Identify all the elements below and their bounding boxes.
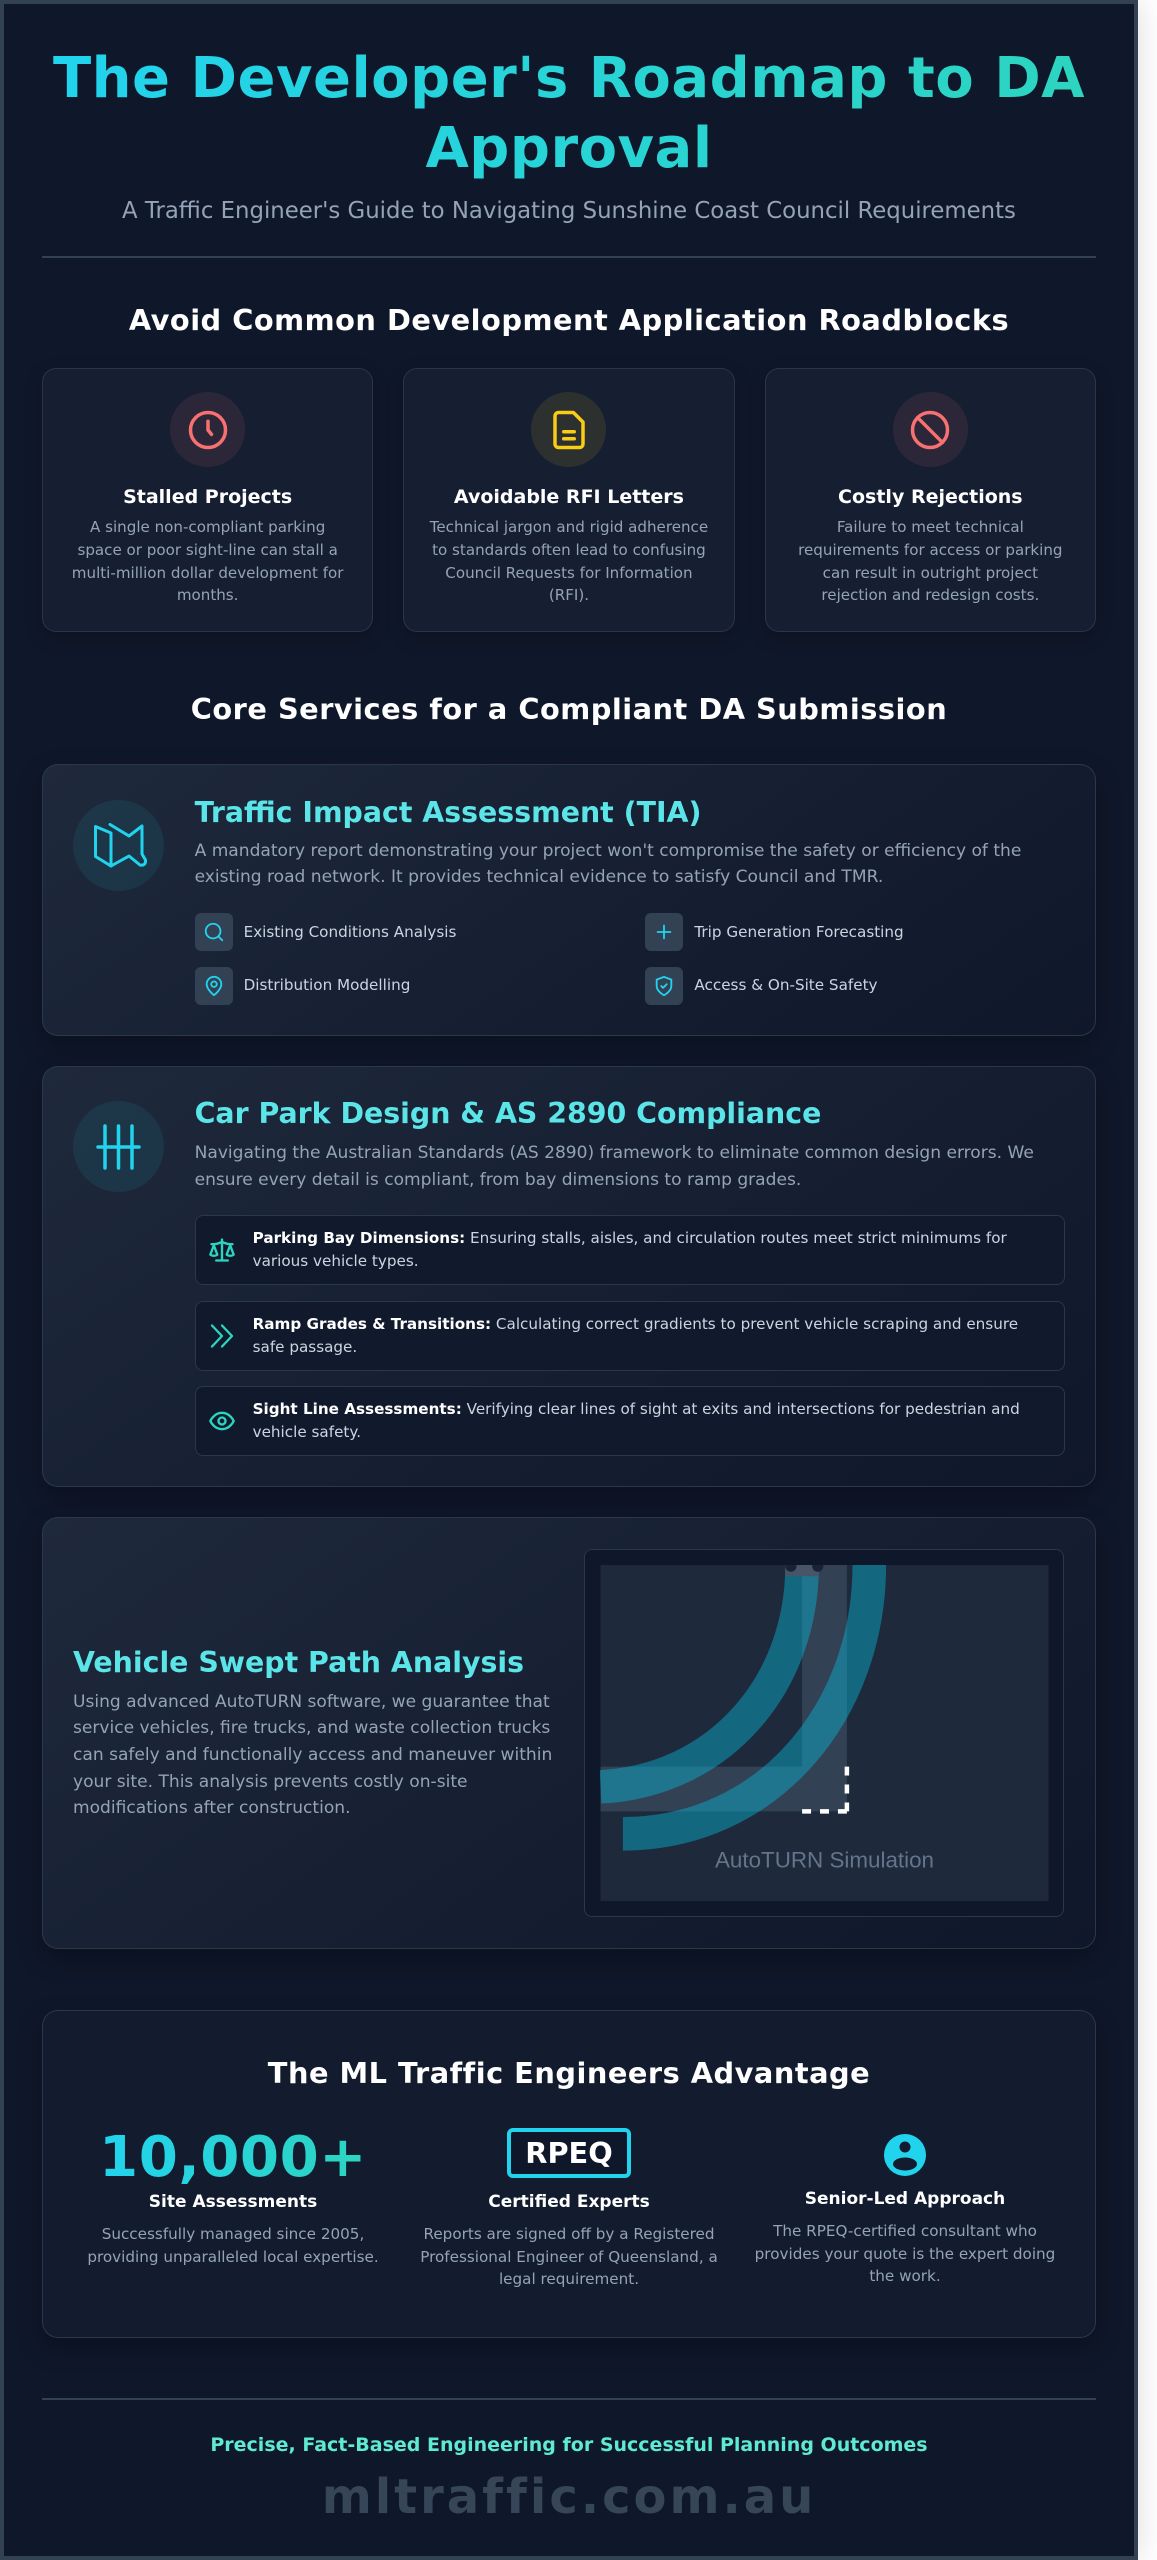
section description: your site. This analysis prevents costly on-site [73,1772,468,1792]
icon: shield check [645,967,683,1005]
detail row: parking bay dimensions [195,1215,1065,1285]
section title: Traffic Impact Assessment (TIA) [195,796,701,828]
RPEQ badge [507,2128,631,2178]
section title: Vehicle Swept Path Analysis [73,1646,524,1678]
panel: car park design [42,1066,1096,1487]
swept path diagram [600,1565,1048,1901]
section description [194,841,1021,887]
stat title: Site Assessments [149,2192,317,2212]
footer tagline: Precise, Fact-Based Engineering for Successful Planning Outcomes [210,2434,928,2456]
card title: Avoidable RFI Letters [454,486,684,508]
stat title: Certified Experts [488,2192,650,2212]
card description: requirements for access or parking [798,541,1063,559]
row text: vehicle safety. [253,1423,361,1441]
section description: modifications after construction. [73,1798,351,1818]
stat title: Senior-Led Approach [805,2189,1005,2209]
icon: scales [209,1238,235,1262]
panel heading: The ML Traffic Engineers Advantage [268,2056,870,2090]
stat: senior-led approach [755,2134,1055,2285]
section description [195,1143,1034,1190]
feature: trip generation [645,913,904,951]
row text: Parking Bay Dimensions: Ensuring stalls, aisles, and circulation routes meet strict minimums for [253,1229,1007,1247]
card description: multi-million dollar development for [72,564,343,582]
card description: to standards often lead to confusing [432,541,706,559]
big number: 10,000+ [99,2124,367,2190]
section description: A mandatory report demonstrating your project won't compromise the safety or efficiency of the [195,841,1021,861]
section description: existing road network. It provides technical evidence to satisfy Council and TMR. [195,867,883,887]
feature: existing conditions [195,913,456,951]
feature label: Existing Conditions Analysis [244,923,456,941]
card description [798,518,1063,604]
stat text: Reports are signed off by a Registered [423,2225,715,2243]
subtitle: A Traffic Engineer's Guide to Navigating Sunshine Coast Council Requirements [122,198,1016,224]
icon: map [73,800,164,891]
panel: RFI letters [403,368,735,632]
stat text: The RPEQ-certified consultant who [773,2222,1037,2240]
icon: chevrons [210,1324,234,1348]
card description: can result in outright project [823,564,1038,582]
icon: search [195,913,233,951]
icon: eye [209,1412,235,1430]
vehicle [785,1561,823,1576]
swept path: inner [600,1565,802,1787]
stat: certified experts [420,2128,718,2288]
section title: Car Park Design & AS 2890 Compliance [195,1096,821,1130]
card description: Technical jargon and rigid adherence [430,518,708,536]
card title: Costly Rejections [838,486,1023,508]
panel: advantage [42,2010,1096,2338]
diagram caption: AutoTURN Simulation [715,1847,934,1872]
icon: prohibited [893,392,968,467]
diagram frame [584,1549,1064,1917]
card description [72,518,344,604]
heading: core services: Core Services for a Compliant DA Submission [191,692,947,726]
section description: can safely and functionally access and maneuver within [73,1745,552,1765]
detail row: ramp grades [195,1301,1065,1371]
card description: (RFI). [549,586,589,604]
stat text: provides your quote is the expert doing [755,2245,1055,2263]
card description: Council Requests for Information [445,564,693,582]
stat text [755,2222,1055,2285]
detail row: sight lines [195,1386,1065,1456]
feature: access and safety [645,967,878,1005]
card title: Stalled Projects [123,486,292,508]
stat text: legal requirement. [499,2270,639,2288]
row text: Sight Line Assessments: Verifying clear lines of sight at exits and intersections for pedestrian and [253,1400,1020,1418]
section description: Using advanced AutoTURN software, we guarantee that [73,1692,550,1712]
icon: map pin [195,967,233,1005]
stat: site assessments [87,2124,379,2266]
section description: service vehicles, fire trucks, and waste collection trucks [73,1718,550,1738]
card description: rejection and redesign costs. [821,586,1039,604]
row text: Ramp Grades & Transitions: Calculating correct gradients to prevent vehicle scraping and ensure [253,1315,1018,1333]
card description: Failure to meet technical [837,518,1024,536]
RPEQ badge: RPEQ [525,2136,613,2170]
icon: person [884,2134,926,2176]
stat text [420,2225,718,2288]
stat text: Professional Engineer of Queensland, a [420,2248,718,2266]
title: The Developer's Roadmap to DA [53,46,1085,110]
building footprint [600,1565,847,1811]
feature label: Trip Generation Forecasting [694,923,904,941]
row text [253,1400,1020,1441]
panel: stalled projects [42,368,373,632]
row text: various vehicle types. [253,1252,419,1270]
title: Approval [425,116,713,180]
title [42,44,1096,184]
dashed corner [802,1767,847,1811]
heading: roadblocks: Avoid Common Development Application Roadblocks [129,303,1009,337]
row text [253,1229,1007,1270]
stat text: Successfully managed since 2005, [102,2225,364,2243]
stat text: the work. [869,2267,941,2285]
panel: swept path analysis [42,1517,1096,1949]
swept path: outer [623,1565,869,1834]
card description: months. [177,586,238,604]
icon: parking lines [73,1101,164,1192]
icon: clock [170,392,245,467]
panel: traffic impact assessment [42,764,1096,1036]
panel: costly rejections [765,368,1096,632]
icon: plus [645,913,683,951]
feature label: Access & On-Site Safety [694,976,878,994]
feature: distribution modelling [195,967,410,1005]
row text: safe passage. [253,1338,357,1356]
stat text [87,2225,379,2266]
icon: document [531,392,606,467]
card description [430,518,708,604]
footer website: mltraffic.com.au [322,2468,816,2524]
card description: space or poor sight-line can stall a [77,541,338,559]
card description: A single non-compliant parking [90,518,325,536]
section description [73,1692,552,1818]
section description: Navigating the Australian Standards (AS 2890) framework to eliminate common design errors. We [195,1143,1034,1163]
feature label: Distribution Modelling [244,976,410,994]
stat text: providing unparalleled local expertise. [87,2248,379,2266]
row text [253,1315,1018,1356]
section description: ensure every detail is compliant, from bay dimensions to ramp grades. [195,1170,801,1190]
